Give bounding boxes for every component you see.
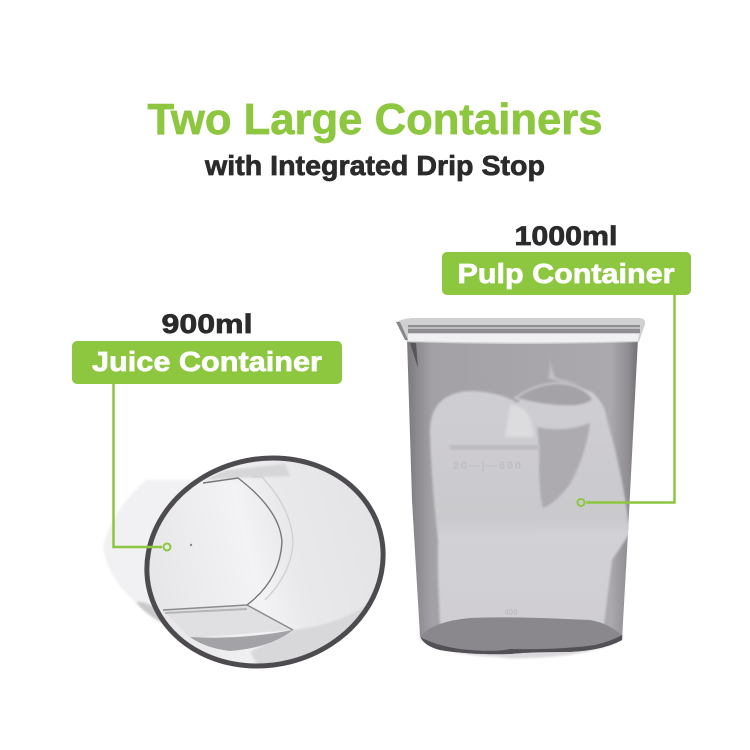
small dot [190, 544, 192, 546]
inner end circle [203, 478, 282, 605]
pulp container photo [396, 318, 645, 660]
pulp label badge [442, 252, 691, 295]
rim interior [125, 433, 405, 691]
juice container photo [104, 456, 386, 668]
light reflection right [517, 389, 628, 624]
rim [396, 318, 645, 344]
pulp label badge: Pulp Container [458, 258, 675, 289]
spout stem [548, 364, 574, 384]
base [420, 617, 622, 654]
juice leader line [114, 384, 170, 550]
base outer highlight [420, 630, 622, 658]
dark rim [125, 433, 405, 691]
scale marks: 20—|—600 [453, 460, 521, 472]
pulp leader line [578, 295, 674, 506]
juice label badge [72, 341, 342, 384]
light reflection left [429, 390, 518, 624]
outer cup shadow [136, 602, 175, 628]
container body [407, 338, 638, 654]
bright overlap [505, 405, 534, 437]
dark reflection [537, 423, 590, 508]
spout reflection [515, 383, 593, 406]
inner bottom floor [172, 606, 291, 638]
lower shaded wall [250, 608, 364, 664]
title: Two Large Containers [148, 95, 602, 144]
pulp container photo: 400 [504, 608, 518, 617]
pulp volume label: 1000ml [514, 221, 618, 251]
horizontal shade [450, 445, 540, 450]
subtitle: with Integrated Drip Stop [204, 150, 545, 181]
juice label badge: Juice Container [92, 346, 322, 377]
top wall strip [205, 464, 290, 480]
juice volume label: 900ml [162, 309, 252, 339]
outer cup body [103, 480, 200, 640]
